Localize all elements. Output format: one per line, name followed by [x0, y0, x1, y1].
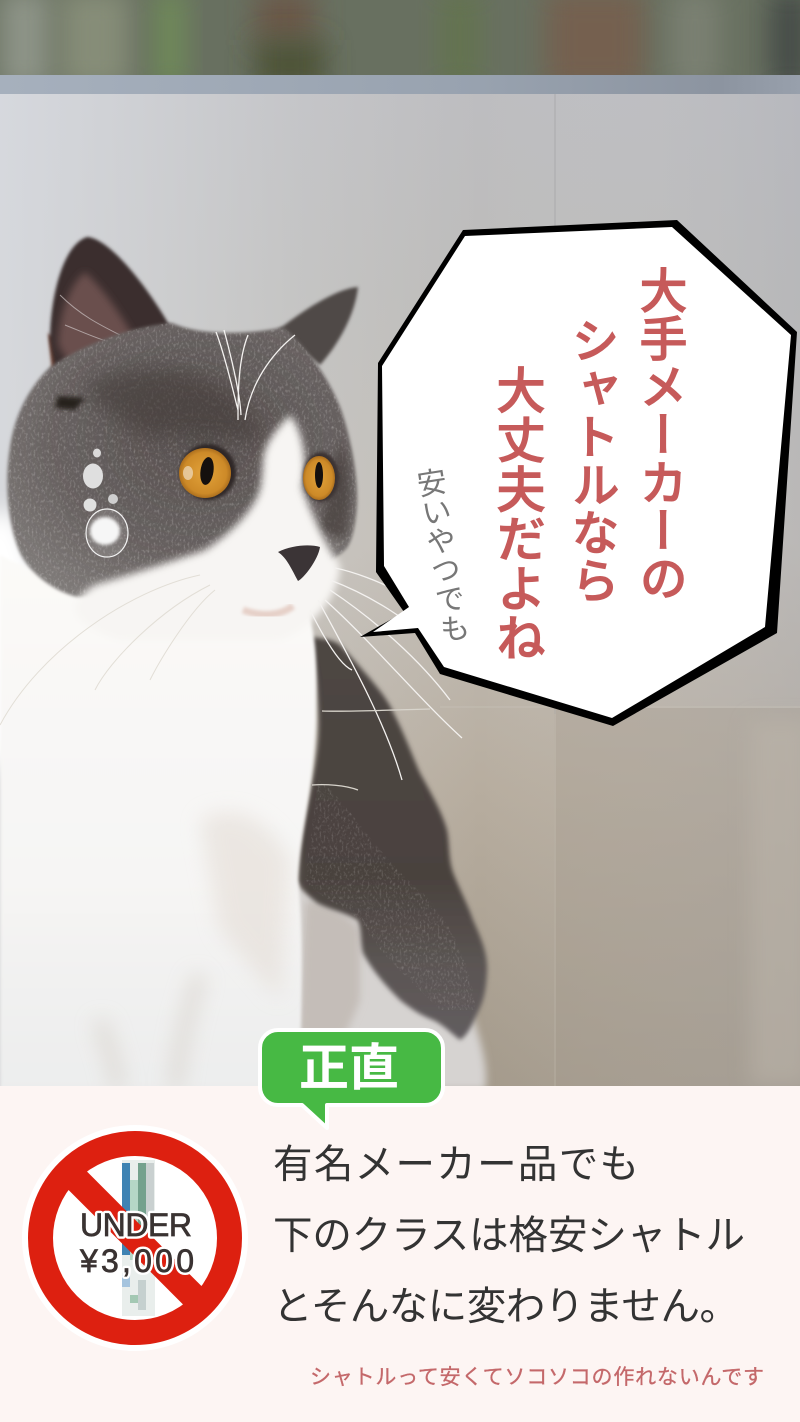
icon: no-entry sign under 3000 yen: ¥3,000 [79, 1243, 194, 1279]
cat back fur [305, 780, 476, 1010]
tear drops [83, 448, 128, 557]
sign text: UNDER [80, 1207, 192, 1243]
window frame band [0, 75, 800, 94]
cat white face [75, 415, 340, 640]
bubble outline [360, 220, 797, 726]
cat forehead shading [85, 368, 265, 441]
handwritten footnote: シャトルって安くてソコソコの作れないんです [310, 1366, 764, 1389]
bubble text column 3: 大丈夫だよね [490, 365, 544, 662]
bubble text column 1: 大手メーカーの [632, 266, 686, 602]
bubble small note: 安いやつでも [411, 465, 471, 645]
badge shape [260, 1030, 443, 1128]
cat nose [278, 545, 320, 581]
cat head fur [7, 323, 357, 598]
blurred garden strip [0, 0, 800, 75]
cat left ear [48, 234, 170, 365]
cat head [7, 323, 357, 598]
cat white chest [0, 555, 316, 1090]
main caption text: 有名メーカー品でも [273, 1143, 639, 1187]
speech bubble [360, 220, 797, 726]
cat front leg shadows [100, 975, 200, 1090]
cat lower white haunch [290, 880, 486, 1090]
cat ear hairs [60, 294, 120, 341]
whiskers [216, 330, 462, 790]
icon: no-entry sign under 3000 yen: UNDER [80, 1207, 192, 1243]
panel: bottom caption [0, 1086, 800, 1422]
main caption text: 下のクラスは格安シャトル [273, 1214, 745, 1258]
main caption text: とそんなに変わりません。 [273, 1285, 739, 1329]
cat mouth [243, 606, 293, 615]
cat gray back [297, 637, 487, 1040]
cat illustration [0, 237, 487, 1090]
sign text [79, 1207, 194, 1279]
prohibition slash [76, 1179, 194, 1297]
bubble fill [373, 227, 791, 718]
pixelated bottle [122, 1160, 155, 1316]
cat right ear [278, 287, 358, 365]
bubble text column 2: シャトルなら [564, 316, 616, 604]
icon: no-entry sign under 3000 yen [22, 1125, 248, 1351]
background photo wall [0, 94, 800, 1086]
sign text: ¥3,000 [79, 1243, 194, 1279]
cat left eye [179, 444, 236, 500]
main caption text [273, 1143, 745, 1329]
badge: honest [260, 1030, 443, 1128]
cat right eye [303, 452, 339, 502]
badge text: 正直 [299, 1040, 399, 1096]
cat left ear fold [46, 332, 56, 368]
